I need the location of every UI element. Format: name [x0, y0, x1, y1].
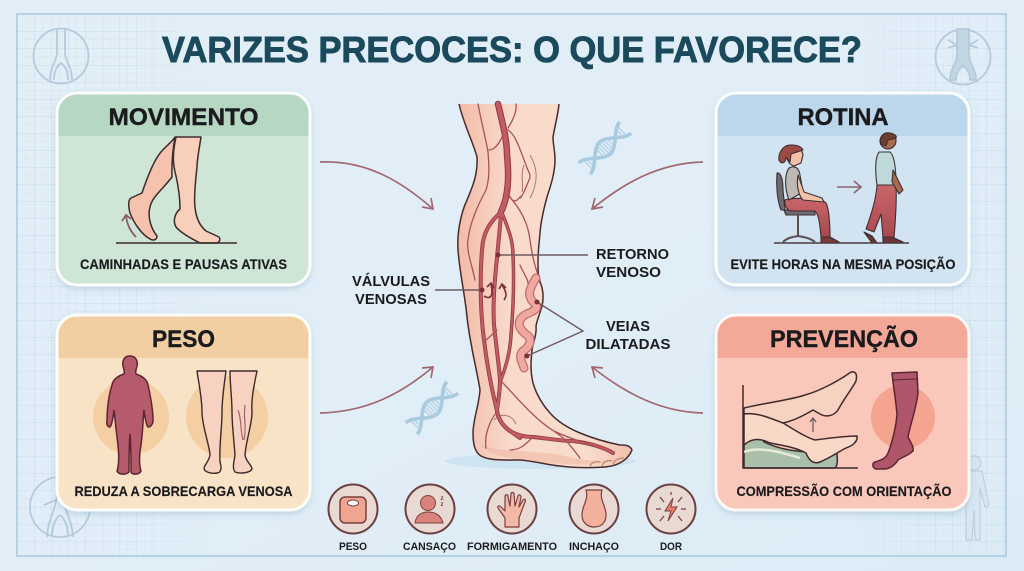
- title: VARIZES PRECOCES: O QUE FAVORECE?: [162, 29, 862, 70]
- icon: walking man: [864, 133, 903, 243]
- heading: movimento: MOVIMENTO: [108, 104, 258, 131]
- icon: cansaço: z: [440, 502, 444, 508]
- panel: movimento: [57, 93, 310, 285]
- callout: válvulas venosas: VÁLVULAS: [352, 273, 430, 290]
- callout: retorno venoso: VENOSO: [596, 264, 661, 281]
- icon: bottom-right ghost human: [958, 456, 989, 540]
- thin superficial veins: [468, 104, 600, 458]
- icon: cansaço: [403, 484, 456, 553]
- icon: dna bottom: [406, 382, 458, 434]
- heading: rotina: ROTINA: [798, 104, 888, 131]
- deep veins dark outline: [481, 104, 613, 453]
- caption: movimento: CAMINHADAS E PAUSAS ATIVAS: [80, 256, 287, 272]
- knee and foot shading: [480, 445, 618, 465]
- heading: peso: PESO: [152, 326, 215, 353]
- callout: válvulas venosas: VENOSAS: [355, 291, 427, 308]
- icon: body silhouette: [107, 356, 153, 474]
- icon: cansaço: z: [440, 496, 444, 502]
- dilated veins: [519, 278, 537, 368]
- icon: peso: [328, 484, 378, 553]
- icon: transition arrow: [837, 181, 861, 193]
- leg fill: [458, 104, 632, 468]
- arrow: peso to leg: [320, 367, 433, 413]
- heading: prevenção: PREVENÇÃO: [770, 325, 918, 353]
- panel: rotina: [716, 93, 969, 285]
- callout: veias dilatadas: VEIAS: [606, 318, 650, 335]
- toes and ankle details: [494, 155, 624, 466]
- icon: cansaço: CANSAÇO: [403, 541, 456, 553]
- caption: prevenção: COMPRESSÃO COM ORIENTAÇÃO: [736, 482, 952, 499]
- deep veins red fill: [481, 104, 613, 453]
- callout: retorno venoso: [496, 246, 669, 281]
- valve arrows: [484, 283, 506, 300]
- callout: veias dilatadas: DILATADAS: [586, 336, 670, 353]
- icon: top-left vein emblem: [34, 28, 88, 84]
- icon: dna top: [579, 122, 631, 174]
- illustration: leg with veins: [458, 104, 632, 468]
- icon: formigamento: FORMIGAMENTO: [467, 541, 557, 553]
- icon: peso: PESO: [339, 541, 367, 553]
- caption: rotina: EVITE HORAS NA MESMA POSIÇÃO: [730, 255, 956, 272]
- callout: retorno venoso: RETORNO: [596, 246, 669, 263]
- panel: prevenção: [716, 315, 969, 510]
- icon: silhouette circle: [93, 379, 169, 455]
- leg outline: [458, 104, 632, 468]
- icon: dor: [646, 484, 696, 553]
- icon: small up arrow: [810, 418, 816, 432]
- icon: legs circle: [186, 376, 268, 458]
- icon: seated woman on chair: [777, 145, 839, 243]
- icon: elevated legs on pillow: [743, 372, 858, 468]
- panel: peso: [57, 315, 310, 510]
- arrow: movimento to leg: [320, 162, 433, 209]
- icon: inchaço: [569, 484, 619, 553]
- icon: bottom-left vein emblem: [30, 477, 90, 537]
- icon: walking legs: [116, 137, 237, 243]
- ground line: rotina: [774, 242, 909, 244]
- arrow: prevenção to leg: [592, 367, 703, 413]
- icon: sock circle: [871, 385, 935, 449]
- icon: dor: DOR: [660, 541, 682, 553]
- icon: inchaço: INCHAÇO: [569, 541, 619, 553]
- callout: válvulas venosas: [352, 273, 484, 308]
- icon row: symptoms: [328, 484, 696, 553]
- foot shadow: [445, 453, 635, 469]
- icon: lift arrow: [122, 215, 136, 237]
- callout: veias dilatadas: [524, 300, 670, 358]
- arrow: rotina to leg: [592, 162, 703, 209]
- icon: front legs with veins: [197, 371, 257, 473]
- caption: peso: REDUZA A SOBRECARGA VENOSA: [74, 483, 292, 499]
- icon: top-right vein emblem: [936, 29, 990, 84]
- icon: formigamento: [467, 484, 557, 553]
- icon: compression sock: [873, 372, 918, 469]
- sock cuff: [893, 379, 917, 380]
